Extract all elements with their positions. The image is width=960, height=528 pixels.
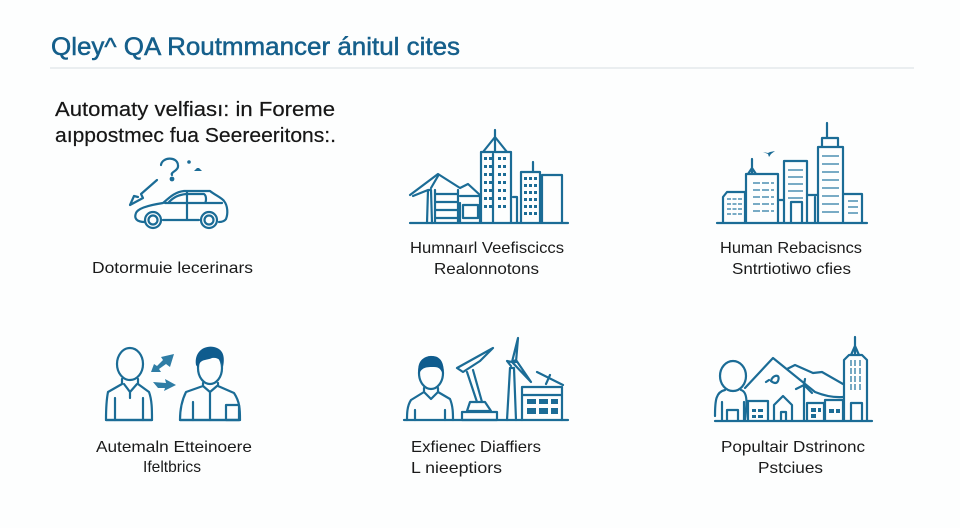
intro text: Automaty velfiası: in Foreme bbox=[55, 99, 335, 121]
label: panel 2: Realonnotons bbox=[434, 261, 539, 278]
label: panel 3 bbox=[720, 240, 862, 278]
icon: person with mountain town bbox=[715, 337, 872, 421]
label: panel 3: Sntrtiotiwo cfies bbox=[732, 261, 851, 278]
icon: city with turbine bbox=[410, 130, 568, 223]
label: panel 5: L nieeptiors bbox=[411, 460, 502, 477]
label: panel 4 bbox=[96, 439, 252, 476]
label: panel 4: Ifeltbrics bbox=[143, 459, 201, 476]
icon: person with turbine and building bbox=[404, 338, 568, 420]
label: panel 4: Autemaln Etteinoere bbox=[96, 439, 252, 456]
label: panel 1: Dotormuie lecerinars bbox=[92, 260, 253, 277]
icon: two people exchanging arrows bbox=[106, 347, 240, 420]
label: panel 6: Popultair Dstrinonc bbox=[721, 439, 865, 456]
label: panel 5: Exfienec Diaffiers bbox=[411, 439, 541, 456]
label: panel 2: Humnaırl Veefisciccs bbox=[410, 240, 564, 257]
icon: skyline with bird bbox=[717, 123, 867, 223]
label: panel 3: Human Rebacisncs bbox=[720, 240, 862, 257]
intro text: aıppostmec fua Seereeritons:. bbox=[55, 125, 336, 147]
label: panel 2 bbox=[410, 240, 564, 278]
icon: car with question mark bbox=[130, 159, 227, 228]
label: panel 6 bbox=[721, 439, 865, 477]
intro text bbox=[55, 99, 336, 147]
label: panel 5 bbox=[411, 439, 541, 477]
label: panel 6: Pstciues bbox=[758, 460, 823, 477]
title: Qley^ QA Routmmancer ánitul cites bbox=[51, 33, 460, 61]
